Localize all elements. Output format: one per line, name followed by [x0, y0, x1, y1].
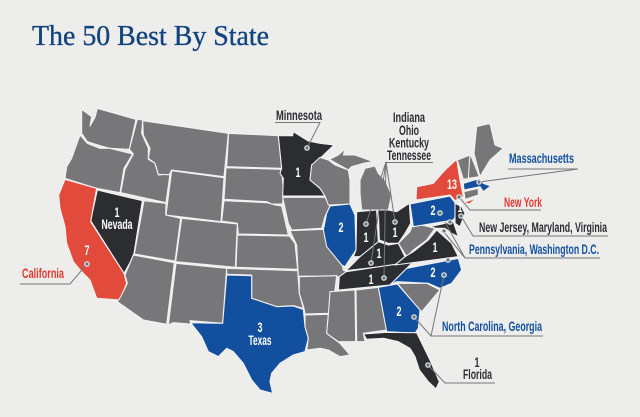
label: Florida: 1	[474, 355, 480, 370]
state: Iowa	[283, 197, 330, 230]
counts on states: 3	[258, 320, 263, 335]
map of the United States	[59, 108, 503, 393]
leader lines and pins	[20, 122, 608, 383]
state: Louisiana	[305, 314, 350, 357]
state: Minnesota	[278, 132, 334, 196]
state: North Dakota	[227, 133, 282, 168]
counts on states: 2	[430, 203, 436, 218]
state: Long Island	[463, 198, 477, 204]
label: California: California	[22, 266, 64, 281]
state: Montana	[143, 121, 228, 177]
state: Oregon	[65, 135, 133, 193]
counts on states: 1	[368, 272, 374, 287]
label: Massachusetts: Massachusetts	[509, 151, 574, 166]
state: Mississippi	[327, 290, 356, 342]
counts on states: 1	[432, 240, 438, 255]
state: Utah	[134, 201, 181, 261]
title: The 50 Best By State	[32, 21, 269, 52]
state: Missouri	[290, 229, 347, 277]
state: California	[59, 179, 127, 300]
label: Florida: Florida	[463, 367, 492, 382]
state: Tennessee	[338, 262, 413, 290]
state: Illinois	[323, 204, 356, 267]
counts on states: 1	[458, 200, 463, 215]
counts on states: 1	[376, 246, 382, 261]
state: North Carolina	[390, 258, 462, 288]
state: Indiana	[353, 210, 378, 257]
state: Virginia	[395, 230, 458, 265]
label: Indiana Ohio Kentucky Tennessee: Ohio	[399, 123, 419, 138]
state: Wisconsin	[310, 157, 350, 205]
counts on states: Nevada	[102, 217, 133, 232]
counts on states: Texas	[248, 333, 272, 348]
state: Georgia	[378, 284, 420, 333]
counts on states: 2	[338, 220, 344, 235]
label: Minnesota: Minnesota	[276, 108, 322, 123]
label: Indiana Ohio Kentucky Tennessee	[387, 110, 431, 163]
state: Ohio	[378, 203, 411, 243]
state: Vermont	[457, 155, 470, 179]
western states	[59, 108, 350, 393]
state: Texas	[191, 275, 308, 393]
counts on states: 1	[296, 165, 301, 180]
state: Maryland	[430, 222, 458, 237]
counts on states: 1	[114, 205, 120, 220]
counts on states: 1	[392, 225, 398, 240]
state: Oklahoma	[227, 268, 303, 308]
label: Indiana Ohio Kentucky Tennessee: Indiana	[393, 110, 425, 125]
state: Connecticut	[464, 188, 478, 199]
counts on states: 7	[84, 243, 90, 258]
state: Colorado	[176, 218, 237, 267]
state: Alabama	[356, 287, 387, 342]
state: Kentucky	[346, 242, 405, 271]
counts on states: 2	[396, 304, 402, 319]
state: Maine	[474, 123, 503, 177]
state: South Carolina	[397, 283, 440, 312]
state: New Hampshire	[468, 153, 479, 178]
state: Florida	[363, 332, 439, 389]
state: New Jersey	[455, 203, 465, 227]
counts on states: 13	[447, 177, 457, 192]
counts on states	[84, 165, 463, 348]
labels and counts	[22, 108, 607, 382]
state: Wyoming	[166, 171, 224, 222]
state: Pennsylvania	[410, 196, 458, 227]
state: New Mexico	[168, 263, 227, 325]
state: Michigan lower peninsula	[360, 166, 392, 210]
state: Arizona	[117, 255, 174, 324]
state: Washington	[82, 108, 136, 149]
state: Michigan upper peninsula	[329, 149, 373, 170]
state: Nebraska	[222, 201, 288, 235]
state: Arkansas	[299, 276, 337, 314]
state: Kansas	[236, 235, 298, 269]
label: New York: New York	[504, 195, 542, 210]
counts on states: 2	[430, 265, 436, 280]
state: Nevada	[91, 190, 142, 273]
state: West Virginia	[398, 223, 435, 257]
state: Idaho	[121, 119, 170, 203]
label: Indiana Ohio Kentucky Tennessee: Kentucky	[389, 136, 429, 150]
state: South Dakota	[224, 168, 283, 204]
label: Florida	[463, 355, 492, 382]
label: North Carolina, Georgia: North Carolina, Georgia	[442, 319, 542, 334]
state: New York	[416, 159, 463, 201]
counts on states: 1	[364, 230, 369, 245]
label: Indiana Ohio Kentucky Tennessee: Tennessee	[387, 148, 431, 163]
state: Massachusetts	[463, 178, 491, 192]
eastern states	[310, 123, 503, 389]
